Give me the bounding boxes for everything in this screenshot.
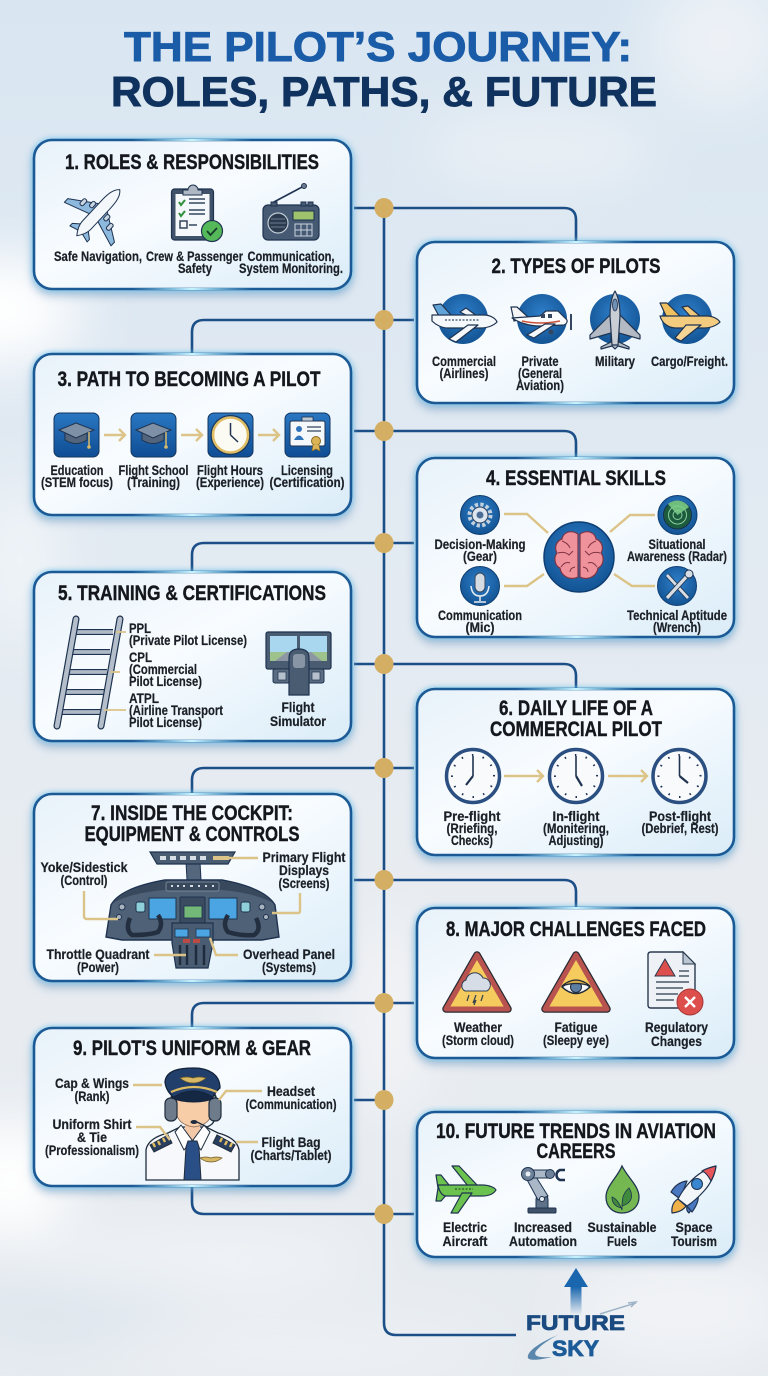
labels panel 9: & Tie	[77, 1130, 107, 1145]
pilot illustration	[146, 1068, 239, 1180]
labels panel 10: Electric	[443, 1220, 487, 1235]
heading 7: 7. INSIDE THE COCKPIT:	[91, 802, 293, 825]
labels panel 8: Fatigue	[554, 1020, 598, 1035]
icon: cargo plane	[660, 294, 720, 344]
labels panel 2: Private	[522, 354, 558, 369]
icon: gear	[460, 496, 500, 534]
licence list: CPL	[129, 650, 152, 665]
arrow	[181, 429, 202, 441]
labels panel 2: Cargo/Freight.	[651, 354, 728, 369]
labels panel 9: Cap & Wings	[55, 1076, 129, 1091]
labels panel 10: Fuels	[607, 1234, 637, 1249]
labels panel 1: Safe Navigation,	[54, 249, 142, 264]
labels panel 4: Situational	[648, 537, 706, 552]
heading 10: CAREERS	[536, 1140, 616, 1163]
timeline connectors	[192, 198, 576, 1335]
labels panel 3: (Training)	[127, 475, 180, 490]
heading 7: EQUIPMENT & CONTROLS	[84, 823, 300, 846]
labels panel 9: Headset	[267, 1084, 315, 1099]
labels panel 6	[444, 809, 718, 848]
labels panel 10: Space	[676, 1220, 712, 1235]
heading 5: 5. TRAINING & CERTIFICATIONS	[58, 582, 326, 605]
arrow	[504, 770, 543, 782]
labels panel 2: Commercial	[432, 354, 496, 369]
panel 7: inside the cockpit	[34, 793, 351, 982]
labels panel 7: Displays	[279, 863, 329, 878]
panel 8: major challenges faced	[417, 907, 734, 1059]
labels panel 6: In-flight	[552, 809, 600, 824]
panel 1: roles and responsibilities	[34, 139, 351, 290]
labels panel 6: (Rriefing,	[446, 821, 498, 836]
labels panel 7: (Control)	[60, 873, 108, 888]
licence list: (Commercial	[129, 662, 197, 677]
labels panel 1: Safety	[178, 261, 212, 276]
labels simulator: Simulator	[270, 713, 326, 729]
labels panel 3	[41, 463, 344, 490]
heading 6	[490, 697, 662, 741]
icon: flight simulator	[266, 632, 331, 695]
labels panel 4: Communication	[438, 608, 522, 623]
panel 5: training and certifications	[34, 571, 351, 742]
labels panel 3: Flight School	[118, 463, 188, 478]
labels panel 3: Licensing	[281, 463, 333, 478]
labels panel 4: Awareness (Radar)	[627, 549, 727, 564]
panel 6: daily life of a commercial pilot	[417, 688, 734, 856]
licence list	[129, 621, 247, 730]
icon: fatigue warning	[545, 955, 607, 1009]
icon: sustainable fuel drop	[606, 1166, 639, 1213]
labels panel 4: Decision-Making	[434, 537, 526, 552]
labels panel 8: Changes	[651, 1034, 702, 1049]
labels panel 9: (Professionalism)	[45, 1143, 139, 1158]
labels panel 9: (Charts/Tablet)	[250, 1148, 332, 1163]
labels panel 4	[434, 537, 727, 635]
labels panel 8: (Sleepy eye)	[543, 1033, 609, 1048]
labels panel 3: (STEM focus)	[41, 475, 113, 490]
icon: regulatory document	[648, 952, 703, 1015]
arrow	[608, 770, 647, 782]
labels panel 3: Flight Hours	[197, 463, 263, 478]
labels panel 6: Pre-flight	[444, 809, 501, 824]
panel 2: types of pilots	[417, 241, 734, 404]
icon: clock in-flight	[550, 750, 602, 802]
labels panel 2: (Airlines)	[440, 366, 488, 381]
labels panel 9: Uniform Shirt	[52, 1117, 132, 1132]
labels panel 10: Automation	[509, 1234, 577, 1249]
labels panel 3: Education	[50, 463, 104, 478]
icon: radio	[263, 184, 319, 240]
labels panel 10: Sustainable	[588, 1220, 656, 1235]
logo: future sky: SKY	[552, 1336, 599, 1361]
labels simulator: Flight	[282, 699, 315, 715]
labels panel 7	[40, 850, 346, 975]
panel 10: future trends in aviation careers	[417, 1111, 734, 1258]
heading 9: 9. PILOT'S UNIFORM & GEAR	[73, 1037, 311, 1060]
labels panel 8: Regulatory	[645, 1020, 708, 1035]
labels panel 2: Military	[595, 354, 635, 369]
labels panel 4: (Wrench)	[653, 620, 701, 635]
labels panel 7: Overhead Panel	[243, 947, 335, 962]
labels panel 2	[432, 354, 728, 393]
labels panel 6: Post-flight	[649, 809, 711, 824]
labels panel 10: Increased	[514, 1220, 572, 1235]
icon: electric aircraft	[436, 1166, 496, 1213]
skill connector lines	[504, 514, 655, 586]
icon: wrench and screwdriver	[658, 566, 696, 606]
icon: commercial airliner	[432, 294, 497, 344]
labels panel 6: Checks)	[451, 833, 493, 848]
title: THE PILOT’S JOURNEY:	[124, 23, 632, 70]
cockpit illustration	[106, 852, 279, 968]
icon: radar	[658, 496, 697, 534]
labels panel 10: Tourism	[671, 1234, 717, 1249]
labels panel 6: (Debrief, Rest)	[642, 821, 718, 836]
labels panel 7: Primary Flight	[262, 850, 346, 865]
icon: clock post-flight	[653, 750, 706, 802]
licence list: Pilot License)	[129, 715, 202, 730]
panel 4: essential skills	[417, 457, 734, 638]
labels panel 8: Weather	[454, 1020, 503, 1035]
uniform leader lines	[133, 1085, 262, 1142]
icon: microphone	[460, 566, 500, 606]
cockpit leader lines	[84, 858, 300, 955]
labels panel 6: (Monitering,	[543, 821, 609, 836]
heading 6: COMMERCIAL PILOT	[490, 718, 662, 741]
icon: flight school cap	[131, 413, 176, 457]
arrow up to panel 10	[564, 1268, 588, 1315]
labels panel 7: (Screens)	[278, 876, 330, 891]
labels panel 9: (Rank)	[74, 1089, 110, 1104]
arrow	[258, 429, 279, 441]
title	[111, 23, 657, 115]
icon: flight hours clock	[208, 413, 253, 457]
labels panel 6: Adjusting)	[548, 833, 604, 848]
logo: future sky: FUTURE	[526, 1311, 625, 1335]
licence list: Pilot License)	[129, 674, 202, 689]
icon: education cap	[54, 413, 99, 457]
icon: clock pre-flight	[446, 750, 500, 802]
labels simulator	[270, 699, 326, 729]
labels panel 1: System Monitoring.	[239, 261, 343, 276]
labels panel 3: (Certification)	[270, 475, 344, 490]
panel 9: pilot's uniform and gear	[34, 1027, 351, 1187]
heading 1: 1. ROLES & RESPONSIBILITIES	[65, 151, 319, 174]
labels panel 10: Aircraft	[442, 1234, 488, 1249]
panel 3: path to becoming a pilot	[34, 353, 351, 516]
labels panel 9	[45, 1076, 336, 1163]
heading 6: 6. DAILY LIFE OF A	[499, 697, 653, 720]
licence list: PPL	[129, 621, 151, 636]
icon: ladder	[57, 619, 126, 726]
labels panel 7: Throttle Quadrant	[46, 947, 150, 962]
heading 7	[84, 802, 300, 846]
labels panel 8: (Storm cloud)	[442, 1033, 514, 1048]
icon: weather warning	[446, 955, 508, 1009]
licence list: (Airline Transport	[129, 703, 223, 718]
heading 4: 4. ESSENTIAL SKILLS	[486, 467, 666, 490]
labels panel 4: (Mic)	[466, 620, 494, 635]
heading 10	[436, 1120, 716, 1163]
icon: private plane	[511, 294, 571, 344]
icon: licence card	[285, 413, 330, 457]
arrow	[104, 429, 125, 441]
labels panel 4: (Gear)	[463, 549, 497, 564]
heading 3: 3. PATH TO BECOMING A PILOT	[58, 368, 321, 391]
icon: robot arm	[522, 1168, 565, 1213]
labels panel 9: Flight Bag	[262, 1135, 320, 1150]
labels panel 4: Technical Aptitude	[627, 608, 727, 623]
licence list: ATPL	[129, 691, 159, 706]
labels panel 2: (General	[518, 366, 562, 381]
labels panel 1	[54, 249, 343, 276]
licence list: (Private Pilot License)	[129, 633, 247, 648]
labels panel 10	[442, 1220, 717, 1249]
icon: military jet	[590, 291, 640, 349]
labels panel 7: Yoke/Sidestick	[40, 860, 128, 875]
labels panel 2: Aviation)	[516, 378, 564, 393]
labels panel 7: (Power)	[77, 960, 119, 975]
icon: rocket	[671, 1166, 716, 1213]
icon: brain	[544, 522, 614, 592]
heading 10: 10. FUTURE TRENDS IN AVIATION	[436, 1120, 716, 1143]
heading 8: 8. MAJOR CHALLENGES FACED	[446, 918, 706, 941]
labels panel 3: (Experience)	[196, 475, 264, 490]
labels panel 1: Crew & Passenger	[146, 249, 244, 264]
logo: future sky	[526, 1302, 636, 1361]
icon: checklist clipboard	[172, 185, 222, 242]
title line 2: ROLES, PATHS, & FUTURE	[111, 68, 657, 115]
heading 2: 2. TYPES OF PILOTS	[492, 255, 660, 278]
labels panel 8	[442, 1020, 708, 1049]
labels panel 9: (Communication)	[246, 1097, 336, 1112]
labels panel 7: (Systems)	[262, 960, 316, 975]
labels panel 1: Communication,	[248, 249, 334, 264]
icon: airplane	[53, 168, 143, 257]
